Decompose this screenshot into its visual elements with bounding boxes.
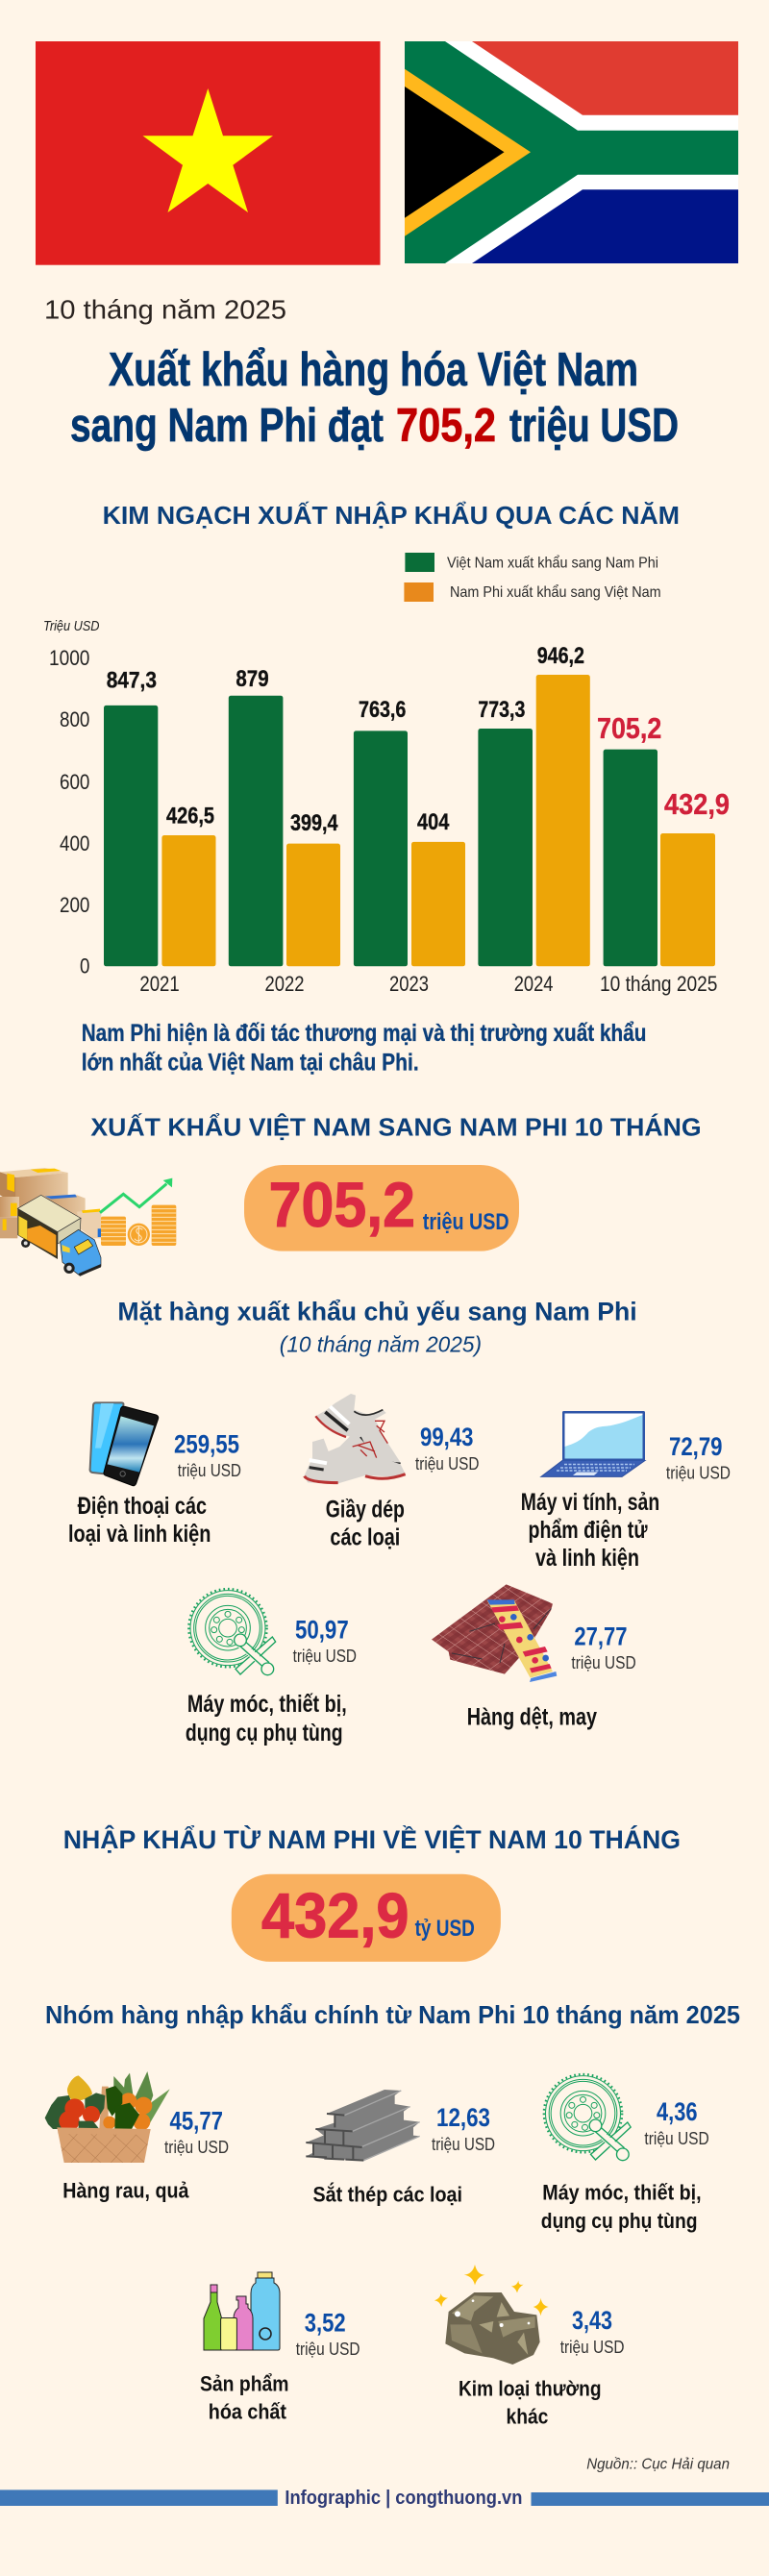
title: Xuất khẩu hàng hóa Việt Nam [109,344,638,396]
item: chemicals: Sản phẩm [200,2372,288,2396]
heading: exports: XUẤT KHẨU VIỆT NAM SANG NAM PHI 10 THÁNG [90,1113,702,1142]
item: steel: 12,63 [436,2103,490,2132]
big number: imports: tỷ USD [415,1916,475,1942]
item: computers [521,1411,731,1572]
item: machinery: 50,97 [295,1616,349,1645]
item: phones: triệu USD [178,1461,241,1480]
heading: imports: NHẬP KHẨU TỪ NAM PHI VỀ VIỆT NAM 10 THÁNG [63,1824,681,1854]
bars 10 months 2025: 432,9 [664,787,730,821]
item: machinery imports: 4,36 [657,2097,698,2126]
item: steel: Sắt thép các loại [313,2182,462,2207]
bars 2024: 2024 [514,972,554,996]
chart legend [404,553,661,602]
bars 2021: 2021 [139,972,180,996]
item: machinery imports: triệu USD [644,2129,709,2148]
item: footwear: triệu USD [415,1454,479,1474]
item: phones: 259,55 [174,1429,239,1458]
y axis labels [49,646,89,978]
icon: truck with boxes and coins [0,1168,176,1276]
item: chemicals: triệu USD [296,2340,360,2359]
item: other metals: triệu USD [560,2338,625,2357]
bars 2021 [104,667,215,996]
bars 10 months 2025: 705,2 [597,711,661,745]
item: footwear: các loại [330,1523,400,1550]
chart legend: Việt Nam xuất khẩu sang Nam Phi [447,555,658,572]
item: other metals: khác [506,2404,548,2428]
item: machinery: triệu USD [293,1647,357,1666]
icon: phone [90,1402,159,1486]
icon: fabric and scarf [432,1584,557,1682]
item: other metals: 3,43 [572,2306,612,2335]
note text [82,1020,646,1077]
icon: gear and wrench [544,2074,631,2161]
y axis labels: 1000 [49,646,89,670]
item: other metals [434,2265,625,2428]
title: 705,2 [396,400,496,452]
item: computers: và linh kiện [535,1545,639,1572]
icon: laptop [541,1411,645,1476]
note text: Nam Phi hiện là đối tác thương mại và thị trường xuất khẩu [82,1020,646,1047]
title: triệu USD [509,400,679,452]
y axis labels: 0 [80,954,89,978]
item: steel: triệu USD [432,2135,495,2154]
bars 2022: 879 [236,666,269,692]
item: vegetables and fruit: 45,77 [169,2107,223,2136]
item: textiles: triệu USD [571,1653,636,1672]
bars 2021: 426,5 [166,803,214,829]
bars 2022: 2022 [265,972,304,996]
title [70,344,679,452]
item: phones: Điện thoại các [78,1493,207,1520]
big number: exports: 705,2 [269,1169,415,1240]
bars 2024: 773,3 [478,697,525,723]
flag: Vietnam [36,41,381,265]
bar chart [43,618,730,996]
icon: steel beams [306,2090,420,2161]
item: footwear: Giầy dép [326,1496,405,1523]
footer: Infographic | congthuong.vn [285,2488,522,2509]
note text: lớn nhất của Việt Nam tại châu Phi. [82,1050,419,1077]
item: computers: 72,79 [669,1432,723,1461]
bars 2024 [478,643,590,996]
item: vegetables and fruit: triệu USD [164,2138,229,2157]
item: phones [68,1402,241,1548]
axis unit: Triệu USD [43,618,100,634]
item: machinery [186,1589,357,1746]
icon: metal ore [434,2265,549,2365]
flag: South Africa [405,41,738,263]
heading: export goods: (10 tháng năm 2025) [280,1332,482,1357]
item: machinery: dụng cụ phụ tùng [186,1720,343,1746]
bars 2022: 399,4 [290,810,338,836]
y axis labels: 200 [60,893,89,917]
item: chemicals: 3,52 [305,2308,346,2337]
item: steel [306,2090,495,2207]
icon: basket [45,2071,170,2163]
bars 2023 [354,697,465,996]
item: textiles: 27,77 [574,1622,627,1650]
item: chemicals: hóa chất [209,2399,287,2424]
heading: import goods: Nhóm hàng nhập khẩu chính từ Nam Phi 10 tháng năm 2025 [45,2000,740,2029]
bars 2023: 2023 [389,972,429,996]
item: machinery imports: Máy móc, thiết bị, [542,2180,702,2204]
bars 2023: 404 [417,809,450,835]
item: machinery imports [541,2074,709,2233]
item: footwear [305,1394,479,1550]
item: footwear: 99,43 [420,1423,473,1451]
icon: gear and wrench [188,1589,276,1675]
item: vegetables and fruit: Hàng rau, quả [62,2179,189,2203]
item: textiles: Hàng dệt, may [467,1703,597,1730]
bars 2023: 763,6 [359,697,406,723]
heading: export goods: Mặt hàng xuất khẩu chủ yếu sang Nam Phi [117,1298,637,1326]
bars 10 months 2025: 10 tháng 2025 [600,972,717,996]
source note: Nguồn:: Cục Hải quan [586,2456,730,2472]
item: computers: triệu USD [666,1464,731,1483]
item: other metals: Kim loại thường [459,2376,602,2400]
big number: exports: triệu USD [423,1209,509,1235]
y axis labels: 600 [60,770,89,794]
item: machinery imports: dụng cụ phụ tùng [541,2209,698,2233]
big number: imports: 432,9 [261,1880,409,1951]
item: vegetables and fruit [45,2071,229,2203]
item: machinery: Máy móc, thiết bị, [187,1691,347,1718]
chart legend: Nam Phi xuất khẩu sang Việt Nam [450,583,661,601]
bars 10 months 2025 [597,711,730,996]
icon: shoes [305,1394,406,1483]
item: phones: loại và linh kiện [68,1521,211,1548]
title: sang Nam Phi đạt [70,400,384,452]
big number: exports [244,1165,519,1251]
item: computers: phẩm điện tử [529,1517,648,1544]
y axis labels: 800 [60,707,89,731]
date label: 10 tháng năm 2025 [44,295,286,325]
heading: chart: KIM NGẠCH XUẤT NHẬP KHẨU QUA CÁC NĂM [103,501,680,530]
bars 2024: 946,2 [537,643,584,669]
item: computers: Máy vi tính, sản [521,1489,659,1516]
bars 2022 [229,666,340,996]
item: chemicals [200,2272,360,2424]
footer [0,2488,769,2509]
big number: imports [232,1874,501,1962]
y axis labels: 400 [60,831,89,855]
icon: bottles [204,2272,280,2350]
item: textiles [432,1584,636,1730]
bars 2021: 847,3 [107,667,157,694]
heading: export goods [117,1298,637,1357]
